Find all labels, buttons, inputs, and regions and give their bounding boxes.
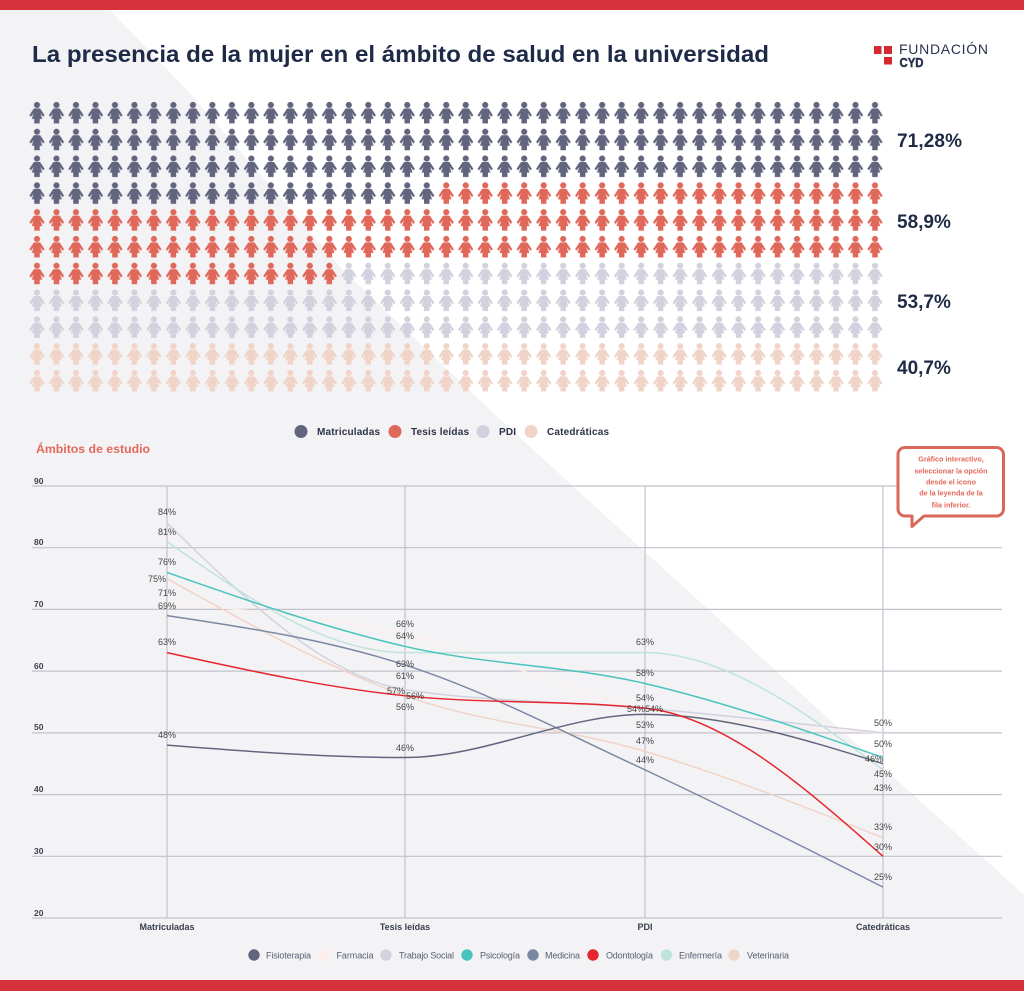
value labels: matriculadas: 84%: [158, 507, 176, 517]
pictogram rows: PDI: [27, 260, 885, 340]
x axis labels: Matriculadas: [139, 922, 195, 932]
line: veterinaria: [167, 579, 883, 838]
legend: areas of study: Trabajo Social: [399, 950, 454, 960]
value labels: matriculadas: 63%: [158, 637, 176, 647]
top red bar: [0, 0, 1024, 10]
legend: areas of study: [248, 949, 789, 961]
legend: pictogram categories: PDI: [499, 427, 516, 438]
y axis grid and labels: 90: [34, 476, 44, 486]
y axis grid and labels: 60: [34, 661, 44, 671]
value labels: catedráticas: 30%: [874, 842, 892, 852]
value labels: matriculadas: 48%: [158, 730, 176, 740]
value labels: tesis leídas: 66%: [396, 619, 414, 629]
callout: interactive chart note: [898, 448, 1004, 526]
logo: Fundación CYD: FUNDACIÓN: [899, 41, 988, 57]
value labels: catedráticas: 43%: [874, 783, 892, 793]
legend: areas of study: Enfermería: [679, 950, 722, 960]
line: medicina: [167, 616, 883, 887]
y axis grid and labels: 70: [34, 599, 44, 609]
value labels: catedráticas: 50%: [874, 739, 892, 749]
y axis grid and labels: 30: [34, 846, 44, 856]
value labels: tesis leídas: [387, 619, 424, 753]
value labels: matriculadas: 75%: [148, 574, 166, 584]
chart heading: Ámbitos de estudio: [36, 441, 150, 456]
value labels: tesis leídas: 46%: [396, 743, 414, 753]
title: La presencia de la mujer en el ámbito de salud en la universidad: [32, 41, 769, 67]
legend: areas of study: Fisioterapia: [266, 950, 311, 960]
x axis labels: PDI: [637, 922, 653, 932]
line chart: [32, 476, 1002, 932]
percentage: catedráticas: 40,7%: [897, 358, 951, 379]
value labels: catedráticas: 46%: [865, 754, 883, 764]
callout: interactive chart note: desde el icono: [926, 478, 977, 486]
value labels: PDI: 54%: [627, 704, 645, 714]
percentage: PDI: 53,7%: [897, 292, 951, 313]
logo: Fundación CYD: CYD: [900, 55, 924, 70]
line: fisioterapia: [167, 714, 883, 764]
value labels: PDI: [627, 637, 663, 765]
legend: pictogram categories: Tesis leídas: [411, 427, 469, 438]
value labels: PDI: 58%: [636, 668, 654, 678]
y axis grid and labels: 80: [34, 537, 44, 547]
value labels: matriculadas: 81%: [158, 527, 176, 537]
percentage: tesis leídas: 58,9%: [897, 212, 951, 233]
x axis labels: Catedráticas: [856, 922, 910, 932]
value labels: matriculadas: [148, 507, 176, 740]
value labels: PDI: 54%: [636, 693, 654, 703]
line: farmacia: [167, 603, 883, 733]
value labels: tesis leídas: 64%: [396, 631, 414, 641]
y axis grid and labels: [32, 476, 1002, 918]
bottom red bar: [0, 980, 1024, 991]
legend: areas of study: Medicina: [545, 950, 580, 960]
value labels: PDI: 63%: [636, 637, 654, 647]
legend: areas of study: Psicología: [480, 950, 520, 960]
value labels: tesis leídas: 61%: [396, 671, 414, 681]
line: trabajo social: [167, 523, 883, 733]
legend: areas of study: Odontología: [606, 950, 653, 960]
callout: interactive chart note: seleccionar la opción: [914, 466, 988, 476]
series lines: [167, 523, 883, 887]
pictogram rows: tesis leídas: [27, 179, 885, 287]
callout: interactive chart note: fila inferior.: [932, 500, 970, 510]
x axis labels: [139, 922, 910, 932]
line: odontología: [167, 653, 883, 856]
value labels: matriculadas: 71%: [158, 588, 176, 598]
legend: areas of study: Farmacia: [336, 950, 374, 960]
percentage: matriculadas: 71,28%: [897, 131, 962, 152]
y axis grid and labels: 20: [34, 908, 44, 918]
x axis labels: Tesis leídas: [380, 922, 430, 932]
value labels: catedráticas: 33%: [874, 822, 892, 832]
value labels: matriculadas: 69%: [158, 601, 176, 611]
y axis grid and labels: 40: [34, 784, 44, 794]
value labels: matriculadas: 76%: [158, 557, 176, 567]
value labels: catedráticas: 50%: [874, 718, 892, 728]
legend: pictogram categories: Matriculadas: [317, 427, 380, 438]
pictogram rows: matriculadas: [27, 99, 885, 206]
line: enfermería: [167, 542, 883, 770]
value labels: PDI: 44%: [636, 755, 654, 765]
value labels: PDI: 47%: [636, 736, 654, 746]
pictogram: women icons grid: [27, 99, 885, 394]
value labels: tesis leídas: 56%: [396, 702, 414, 712]
legend: areas of study: Veterinaria: [747, 950, 789, 960]
line: psicología: [167, 572, 883, 758]
pictogram rows: catedráticas: [27, 340, 885, 394]
value labels: tesis leídas: 57%: [387, 686, 405, 696]
value labels: PDI: 54%: [645, 704, 663, 714]
value labels: PDI: 53%: [636, 720, 654, 730]
legend: pictogram categories: Catedráticas: [547, 427, 609, 438]
value labels: tesis leídas: 56%: [406, 691, 424, 701]
callout: interactive chart note: Gráfico interactivo,: [918, 454, 984, 464]
value labels: catedráticas: 25%: [874, 872, 892, 882]
logo: Fundación CYD: [874, 41, 988, 70]
value labels: catedráticas: 45%: [874, 769, 892, 779]
callout: interactive chart note: de la leyenda de la: [919, 488, 984, 498]
y axis grid and labels: 50: [34, 722, 44, 732]
value labels: tesis leídas: 63%: [396, 659, 414, 669]
legend: pictogram categories: [294, 425, 609, 438]
value labels: catedráticas: [865, 718, 892, 882]
